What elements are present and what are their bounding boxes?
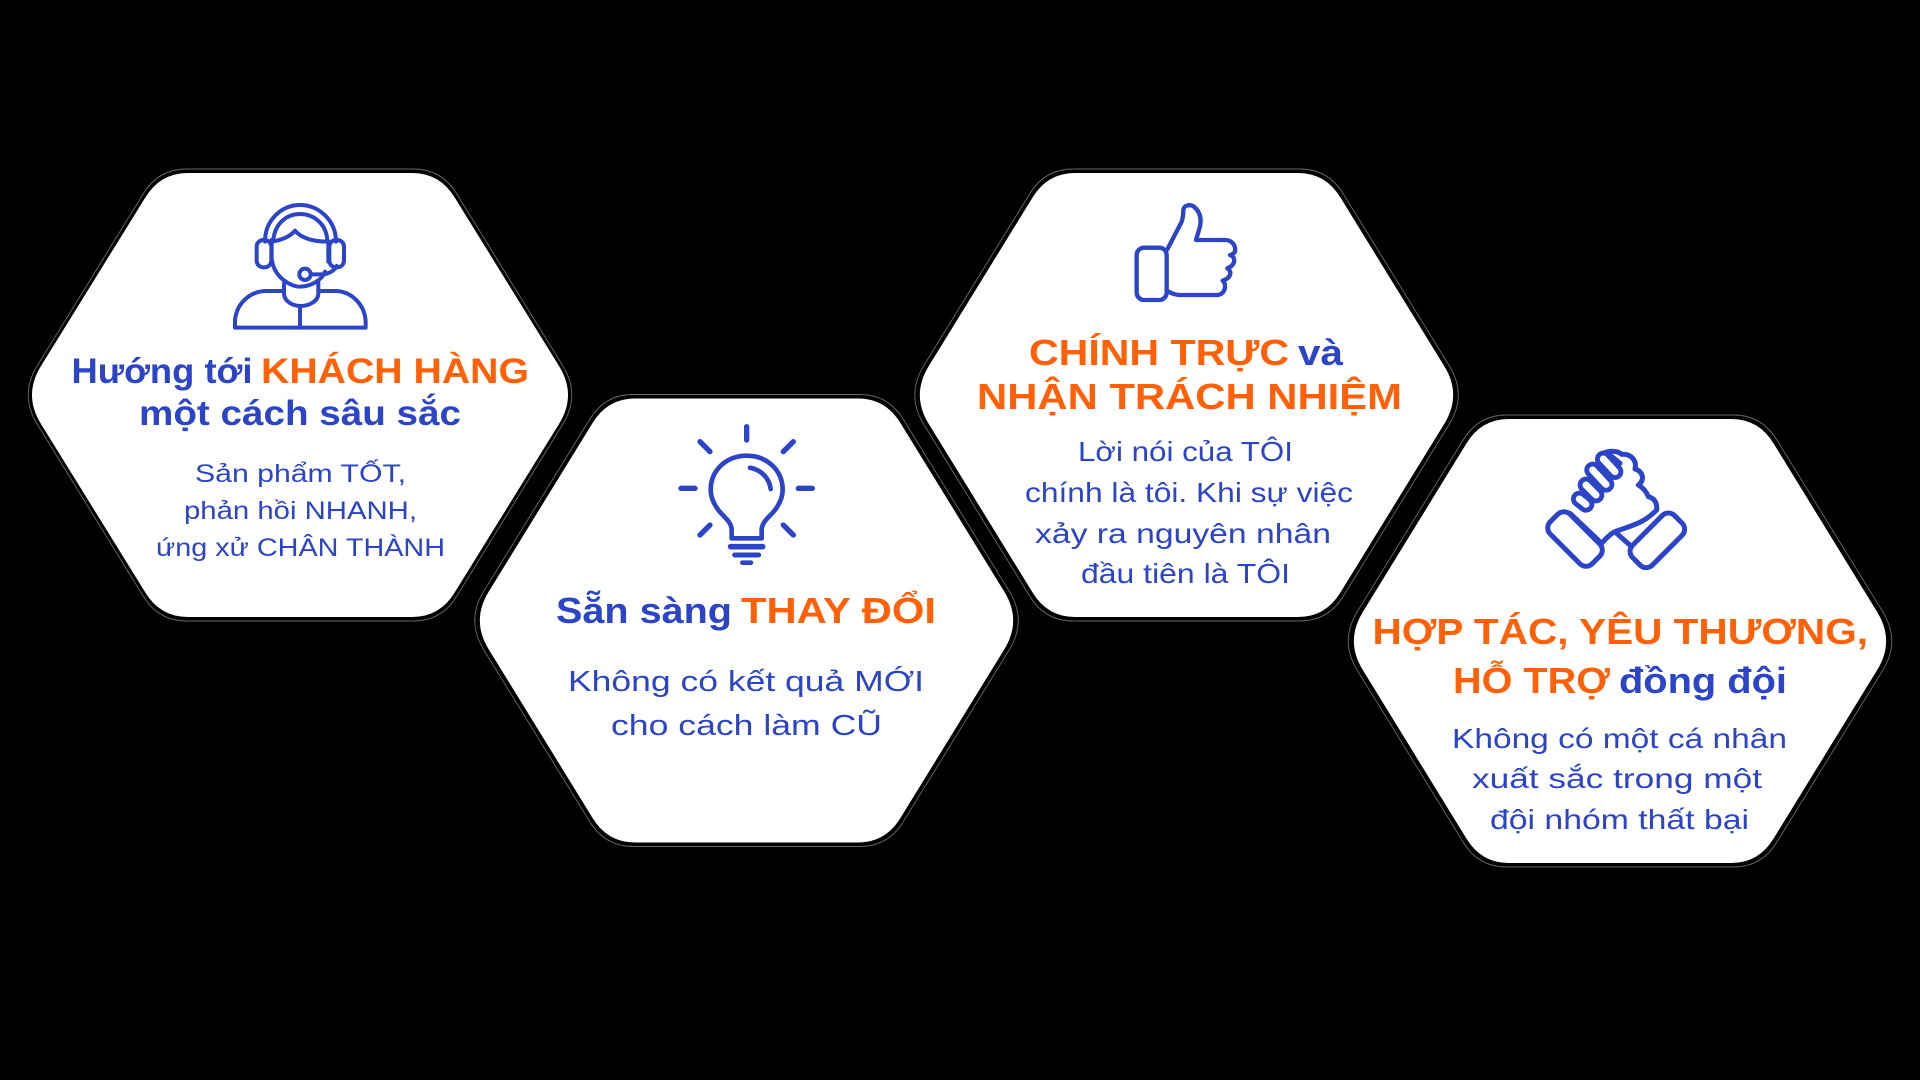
panel: chính trực và nhận trách nhiệm	[915, 169, 1458, 621]
text: mô tả thay đổi: Không có kết quả MỚI	[568, 665, 924, 698]
panel: hướng tới khách hàng	[28, 169, 572, 621]
text: mô tả chính trực: đầu tiên là TÔI	[1081, 558, 1290, 589]
heading: chính trực và nhận trách nhiệm	[977, 332, 1402, 417]
text: mô tả khách hàng: ứng xử CHÂN THÀNH	[156, 533, 445, 562]
heading: chính trực và nhận trách nhiệm: CHÍNH TRỰC	[1029, 332, 1289, 373]
heading: chính trực và nhận trách nhiệm: NHẬN TRÁCH NHIỆM	[977, 375, 1402, 417]
icon: clasped hands	[1544, 451, 1688, 571]
text: mô tả đồng đội: xuất sắc trong một	[1472, 763, 1762, 794]
text: mô tả đồng đội: đội nhóm thất bại	[1490, 804, 1749, 835]
heading: hướng tới khách hàng: KHÁCH HÀNG	[261, 351, 529, 391]
heading: sẵn sàng thay đổi: Sẵn sàng	[556, 589, 732, 631]
icon: light bulb	[681, 427, 812, 563]
heading: hợp tác yêu thương hỗ trợ đồng đội: HỢP TÁC, YÊU THƯƠNG,	[1372, 610, 1868, 652]
icon: thumbs up	[1137, 205, 1235, 300]
heading: hợp tác yêu thương hỗ trợ đồng đội	[1372, 610, 1868, 701]
text: mô tả thay đổi	[568, 665, 924, 742]
panel: hợp tác yêu thương hỗ trợ đồng đội	[1348, 415, 1892, 867]
text: mô tả chính trực: chính là tôi. Khi sự việc	[1025, 477, 1353, 508]
icon: customer support headset	[235, 205, 366, 328]
text: mô tả khách hàng	[156, 458, 445, 562]
text: mô tả khách hàng: Sản phẩm TỐT,	[195, 458, 406, 488]
text: mô tả thay đổi: cho cách làm CŨ	[611, 708, 882, 742]
heading: hướng tới khách hàng: Hướng tới	[72, 352, 252, 391]
heading: hướng tới khách hàng: một cách sâu sắc	[139, 393, 461, 433]
heading: hợp tác yêu thương hỗ trợ đồng đội: đồng đội	[1619, 660, 1787, 701]
text: mô tả khách hàng: phản hồi NHANH,	[184, 497, 417, 525]
text: mô tả chính trực	[1025, 436, 1353, 589]
heading: hướng tới khách hàng	[72, 351, 529, 433]
text: mô tả chính trực: Lời nói của TÔI	[1078, 436, 1293, 467]
text: mô tả chính trực: xảy ra nguyên nhân	[1035, 518, 1331, 549]
heading: hợp tác yêu thương hỗ trợ đồng đội: HỖ TRỢ	[1453, 659, 1610, 701]
text: mô tả đồng đội: Không có một cá nhân	[1452, 723, 1787, 754]
panel: sẵn sàng thay đổi	[475, 395, 1018, 846]
text: mô tả đồng đội	[1452, 723, 1787, 835]
heading: chính trực và nhận trách nhiệm: và	[1298, 332, 1344, 373]
heading: sẵn sàng thay đổi: THAY ĐỔI	[741, 588, 936, 631]
heading: sẵn sàng thay đổi	[556, 588, 936, 631]
